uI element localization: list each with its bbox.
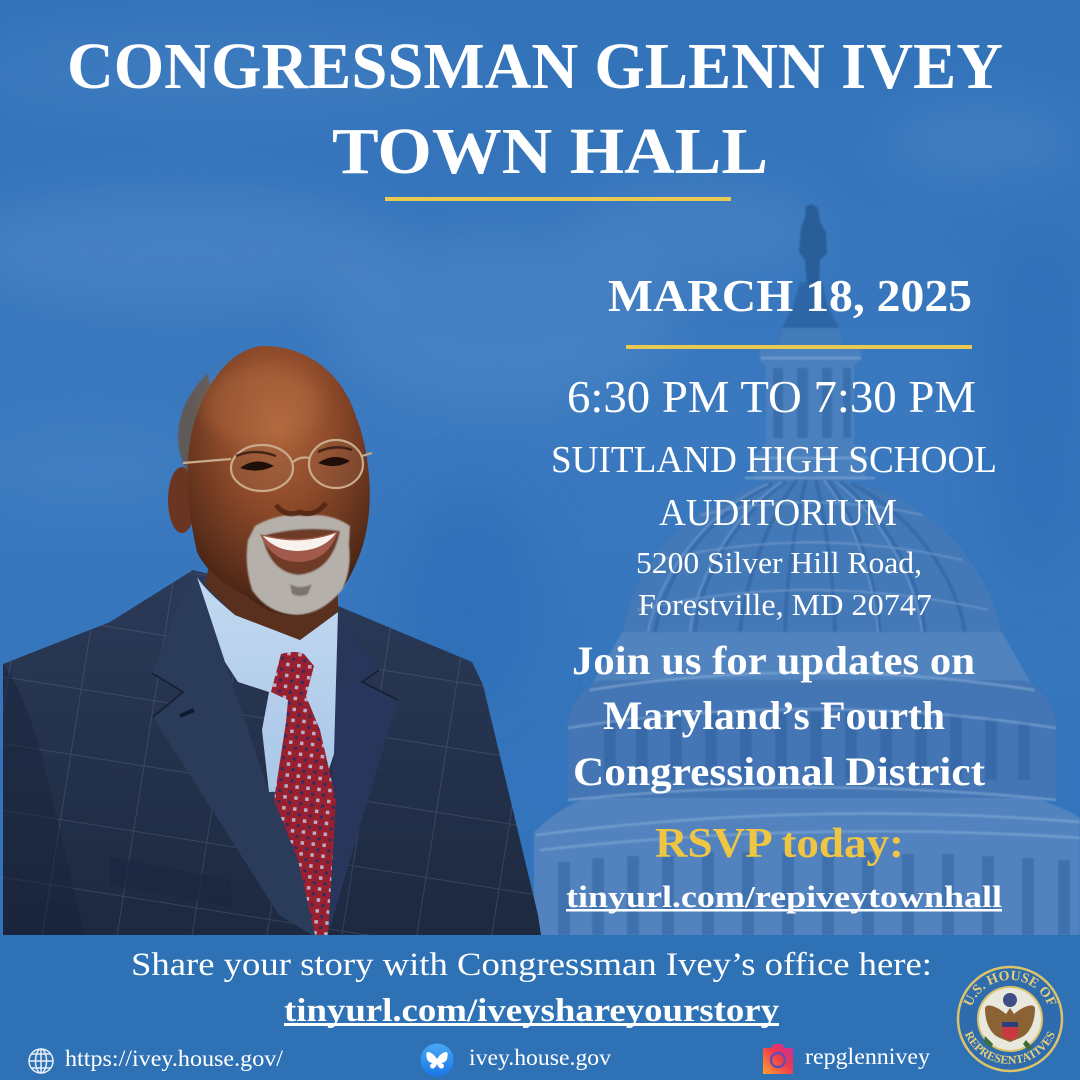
icon: Instagram [763,1044,793,1074]
title: CONGRESSMAN GLENN IVEY [67,30,1003,103]
time: 6:30 PM TO 7:30 PM [567,371,976,422]
icon: globe [29,1049,53,1073]
address [636,545,932,622]
title [67,30,1003,188]
head and ears [168,346,370,616]
neck [205,560,338,640]
seal of the U.S. House of Representatives [956,966,1064,1072]
footer band [0,935,1080,1080]
RSVP heading: RSVP today: [655,821,904,867]
event description: Congressional District [573,749,986,794]
venue: AUDITORIUM [659,492,897,534]
shirt collar [197,577,338,792]
Instagram label: repglennivey [805,1044,931,1069]
title: TOWN HALL [332,115,768,188]
website label: https://ivey.house.gov/ [65,1046,284,1071]
event description [572,638,986,794]
smile [260,531,338,562]
image: US Capitol dome, faded into the sky [534,204,1080,936]
event description: Join us for updates on [572,638,975,683]
goatee and moustache [247,515,350,615]
icon: Bluesky butterfly [420,1044,454,1076]
share your story link: tinyurl.com/iveyshareyourstory [284,993,780,1029]
suit jacket [3,570,541,935]
date underline [626,345,972,349]
Bluesky label: ivey.house.gov [469,1045,612,1070]
necktie [271,652,336,935]
venue [551,439,997,534]
eyes and nose [236,447,352,514]
portrait of Congressman Glenn Ivey [3,346,541,935]
seal of the U.S. House of Representatives: REPRESENTATIVES [964,1030,1054,1064]
address: Forestville, MD 20747 [638,587,932,622]
address: 5200 Silver Hill Road, [636,545,922,580]
venue: SUITLAND HIGH SCHOOL [551,439,997,481]
seal of the U.S. House of Representatives: U.S. HOUSE OF [963,970,1057,1005]
title underline [385,197,731,201]
RSVP link: tinyurl.com/repiveytownhall [566,879,1002,914]
glasses [183,440,372,491]
share your story text: Share your story with Congressman Ivey’s office here: [131,947,932,983]
event description: Maryland’s Fourth [603,693,945,738]
date: MARCH 18, 2025 [608,270,972,321]
eagle [984,993,1035,1050]
